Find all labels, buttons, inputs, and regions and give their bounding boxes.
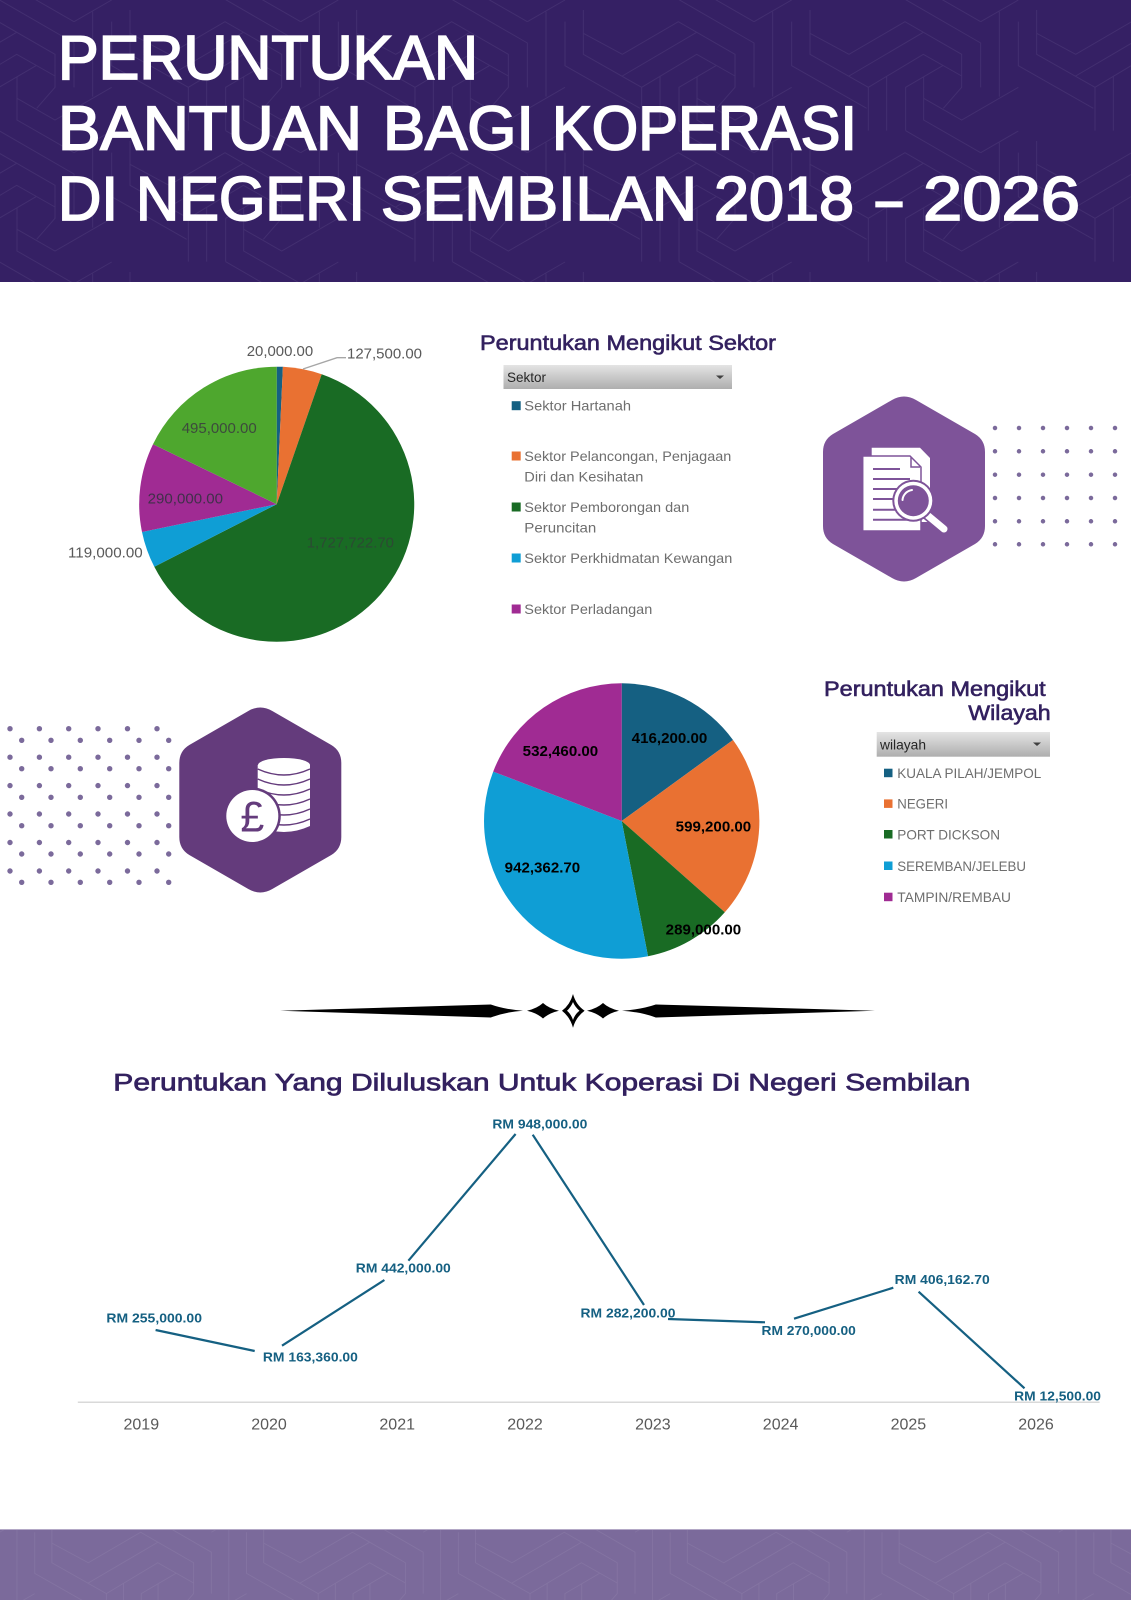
dropdown: sektor: Sektor xyxy=(507,369,546,385)
line chart: RM 255,000.00 xyxy=(106,1310,202,1326)
line chart: RM 270,000.00 xyxy=(762,1323,856,1338)
line chart: RM 406,162.70 xyxy=(895,1272,990,1287)
legend: wilayah: SEREMBAN/JELEBU xyxy=(897,858,1026,874)
line chart: 2021 xyxy=(379,1416,415,1434)
title: BANTUAN xyxy=(58,94,362,164)
dot grid right xyxy=(995,428,1115,544)
title: NEGERI xyxy=(136,165,365,234)
heading: line chart: Peruntukan Yang Diluluskan Untuk Koperasi Di Negeri Sembilan xyxy=(113,1070,970,1096)
legend: wilayah xyxy=(884,765,1041,905)
title: SEMBILAN xyxy=(381,165,697,234)
pie chart: sektor: 20,000.00 xyxy=(247,343,313,360)
line chart: 2023 xyxy=(635,1416,671,1434)
footer banner xyxy=(0,1529,1131,1600)
heading: sektor: Peruntukan Mengikut Sektor xyxy=(480,332,776,355)
line chart: RM 12,500.00 xyxy=(1014,1388,1101,1404)
dropdown: sektor xyxy=(504,365,732,389)
title: BAGI xyxy=(383,94,534,164)
header banner xyxy=(0,0,1131,282)
title: PERUNTUKAN xyxy=(58,24,478,93)
line chart: 2020 xyxy=(251,1416,287,1434)
legend: sektor: Sektor Perkhidmatan Kewangan xyxy=(524,550,732,566)
line chart: 2024 xyxy=(763,1416,798,1434)
legend: sektor: Sektor Pelancongan, Penjagaan xyxy=(524,448,731,464)
dropdown: wilayah: wilayah xyxy=(879,736,926,752)
heading: wilayah xyxy=(824,678,1051,725)
title: KOPERASI xyxy=(552,94,857,164)
ornamental divider xyxy=(280,994,875,1028)
heading: wilayah: Peruntukan Mengikut xyxy=(824,678,1046,701)
pie chart: wilayah: 942,362.70 xyxy=(505,860,580,876)
title: DI xyxy=(58,165,118,234)
line chart: 2019 xyxy=(124,1416,159,1434)
icon: coins hexagon xyxy=(179,708,341,892)
line chart: RM 948,000.00 xyxy=(492,1116,587,1132)
line chart: 2022 xyxy=(507,1416,543,1434)
pie chart: sektor: 119,000.00 xyxy=(68,544,143,562)
line chart xyxy=(78,1116,1101,1434)
legend: sektor: Sektor Perladangan xyxy=(524,601,652,617)
title xyxy=(58,24,1080,234)
title: 2018 xyxy=(714,165,854,234)
pie chart: wilayah: 532,460.00 xyxy=(523,743,598,760)
dot grid left xyxy=(10,729,169,882)
legend: sektor: Sektor Pemborongan dan xyxy=(524,499,689,515)
pie chart: sektor: 495,000.00 xyxy=(182,420,257,437)
line chart: 2026 xyxy=(1018,1416,1054,1434)
pie chart: wilayah: 599,200.00 xyxy=(676,818,751,836)
pie chart: sektor: 1,727,722.70 xyxy=(307,534,394,552)
title: – xyxy=(876,165,902,234)
pie chart: sektor: 290,000.00 xyxy=(148,490,223,508)
pie chart: wilayah: 289,000.00 xyxy=(666,922,741,938)
legend: wilayah: PORT DICKSON xyxy=(897,826,1000,842)
pie chart: wilayah: 416,200.00 xyxy=(632,730,707,747)
pie chart: wilayah xyxy=(484,683,759,959)
pie chart: sektor: 127,500.00 xyxy=(347,346,422,362)
icon: document search hexagon xyxy=(823,396,985,582)
line chart: 2025 xyxy=(891,1416,926,1434)
legend: sektor xyxy=(512,398,732,617)
heading: wilayah: Wilayah xyxy=(968,702,1051,725)
dropdown: wilayah xyxy=(877,732,1050,757)
legend: sektor: Sektor Hartanah xyxy=(524,398,631,414)
legend: wilayah: NEGERI xyxy=(897,796,948,812)
pie chart: sektor xyxy=(68,343,422,642)
line chart: RM 163,360.00 xyxy=(263,1350,358,1364)
line chart: RM 282,200.00 xyxy=(580,1306,676,1320)
title: 2026 xyxy=(923,165,1080,234)
legend: wilayah: KUALA PILAH/JEMPOL xyxy=(897,765,1041,781)
legend: sektor: Peruncitan xyxy=(524,520,596,536)
legend: sektor: Diri dan Kesihatan xyxy=(524,468,643,484)
legend: wilayah: TAMPIN/REMBAU xyxy=(897,889,1011,905)
line chart: RM 442,000.00 xyxy=(356,1260,451,1276)
icon: coins hexagon: £ xyxy=(240,794,264,842)
